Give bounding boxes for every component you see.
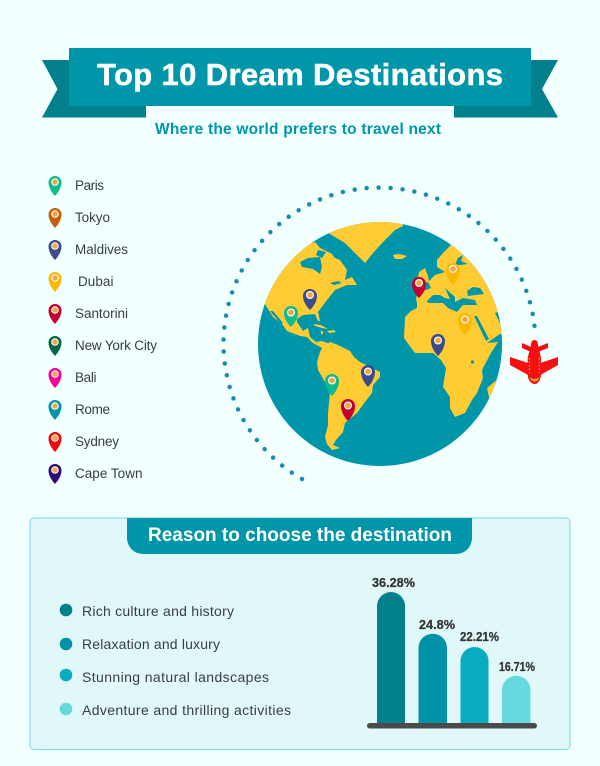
pin: South America green marker [325, 374, 339, 396]
British Isles [418, 268, 429, 283]
pin: Dubai marker north [446, 263, 460, 285]
bar: 16.71% [499, 660, 535, 724]
legend item: Paris [48, 176, 104, 196]
dotted flight path [224, 188, 535, 479]
pin: Maldives marker [303, 289, 317, 310]
legend item: Bali [48, 368, 96, 388]
legend item: Adventure: Adventure and thrilling activities [82, 702, 291, 718]
Iceland [393, 254, 407, 259]
Cuba and Caribbean islands [313, 324, 336, 334]
legend item: Maldives: Maldives [75, 242, 128, 257]
icon: airplane [510, 340, 558, 384]
legend item: Cape Town [48, 464, 142, 484]
legend item: Cape Town: Cape Town [75, 466, 142, 481]
legend item: Santorini: Santorini [75, 306, 128, 321]
title ribbon [42, 48, 558, 118]
Hudson Bay [300, 257, 322, 274]
pin: Santorini marker [412, 277, 426, 298]
bar chart [367, 576, 537, 728]
pin: South America red marker [341, 399, 355, 421]
legend item: Dubai [48, 272, 114, 292]
legend item: Rich culture: Rich culture and history [82, 603, 234, 619]
panel heading tab [127, 518, 472, 554]
panel: reasons [30, 518, 570, 750]
bar: 36.28% [372, 576, 415, 724]
chart baseline [367, 723, 537, 728]
globe ocean [258, 222, 502, 466]
South America [317, 342, 380, 450]
ribbon right tail [454, 60, 558, 118]
Greenland [328, 222, 403, 263]
Red Sea [474, 316, 489, 341]
Eurasia and Africa [404, 245, 502, 417]
legend: destinations [48, 176, 157, 484]
legend item: Tokyo [48, 208, 110, 228]
legend item: Tokyo: Tokyo [75, 210, 110, 225]
Persian Gulf [495, 312, 500, 323]
legend item: Rome [48, 400, 110, 420]
Baltic [455, 255, 468, 265]
Lake Victoria [471, 360, 474, 364]
bar: 16.71%: 16.71% [499, 660, 535, 674]
bar: 22.21%: 22.21% [460, 630, 499, 644]
title: Top 10 Dream Destinations [97, 57, 503, 92]
reasons legend [60, 603, 291, 718]
Mediterranean [427, 288, 477, 312]
North America [264, 242, 357, 348]
map pins [284, 263, 472, 421]
legend item: New York City [48, 336, 157, 356]
bar: 24.8%: 24.8% [419, 618, 455, 632]
legend item: Sydney: Sydney [75, 434, 119, 449]
ribbon front band [69, 48, 531, 106]
ribbon left tail [42, 60, 146, 118]
legend item: Paris: Paris [75, 178, 104, 193]
Black Sea [467, 287, 484, 296]
legend item: Dubai: Dubai [78, 274, 114, 289]
pin: South America blue marker [361, 365, 375, 387]
legend item: Sydney [48, 432, 119, 452]
pin: Dubai marker south [458, 313, 472, 335]
legend item: Natural landscapes: Stunning natural landscapes [82, 669, 269, 685]
Arctic island [326, 251, 335, 258]
Canadian channel [316, 250, 326, 258]
globe [258, 222, 502, 466]
continents [264, 222, 502, 450]
legend item: New York City: New York City [75, 338, 157, 353]
pin: Africa marker [431, 334, 445, 356]
legend item: Rome: Rome [75, 402, 110, 417]
panel heading: Reason to choose the destination [148, 525, 452, 546]
legend item: Santorini [48, 304, 128, 324]
bar: 22.21% [460, 630, 499, 724]
Great Lakes [330, 281, 342, 285]
legend item: Maldives [48, 240, 128, 260]
Madagascar [487, 380, 496, 398]
Gulf of California [270, 311, 283, 324]
subtitle: Where the world prefers to travel next [155, 121, 441, 138]
legend item: Bali: Bali [75, 370, 96, 385]
inland seas [270, 250, 502, 364]
panel background [30, 518, 570, 750]
bar: 24.8% [418, 618, 455, 724]
pin: Paris marker [284, 306, 298, 327]
bar: 36.28%: 36.28% [372, 576, 415, 590]
legend item: Relaxation: Relaxation and luxury [82, 636, 220, 652]
